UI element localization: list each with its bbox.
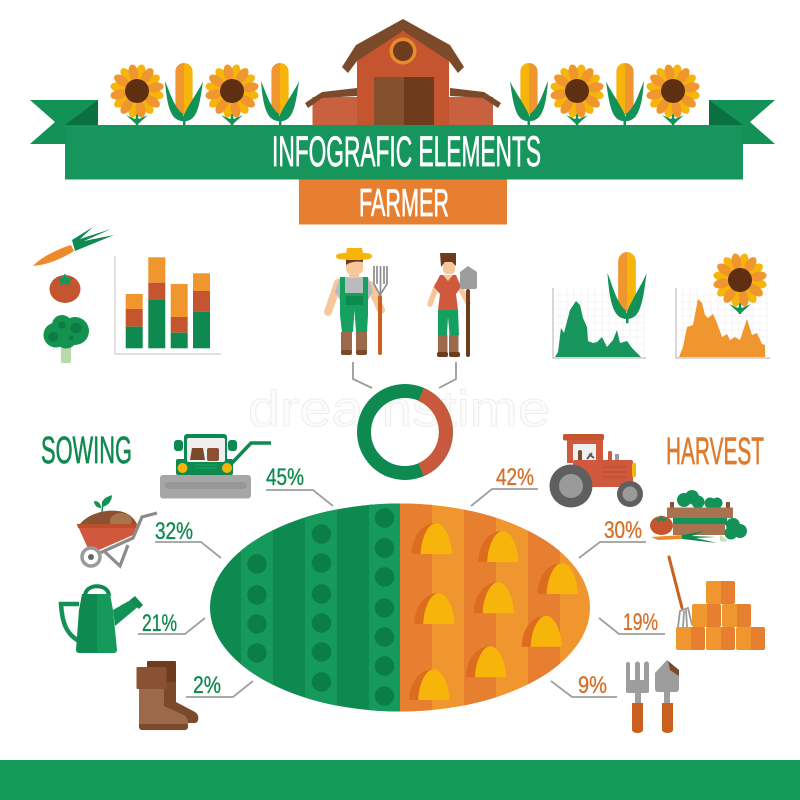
bar 4 [193, 273, 210, 348]
label 19%: 19% [623, 609, 658, 636]
ribbon banner [30, 100, 775, 180]
sunflower area chart [676, 253, 770, 358]
label 30%: 30% [604, 517, 642, 544]
connector lines to donut [353, 362, 456, 388]
icon: wheelbarrow [77, 495, 157, 566]
label 42%: 42% [496, 464, 534, 491]
sunflower row right [510, 63, 700, 125]
farmer man [328, 248, 387, 355]
harvest half [400, 500, 590, 715]
watermark: dreamstime [248, 381, 550, 437]
barn [305, 19, 501, 125]
leader lines [138, 489, 665, 697]
label 32%: 32% [155, 518, 193, 545]
sunflower row left [110, 63, 299, 125]
donut chart [364, 391, 446, 473]
icon: vegetable crate [650, 490, 747, 543]
icon: boots [136, 661, 198, 730]
bar 3 [171, 284, 188, 348]
corn area chart [553, 252, 647, 358]
sowing half [210, 500, 400, 715]
icon: watering can [61, 586, 143, 653]
subtitle: FARMER [359, 182, 449, 225]
icon: seeder [160, 434, 271, 498]
title: INFOGRAFIC ELEMENTS [272, 128, 541, 176]
subtitle box [299, 180, 507, 224]
icon: broccoli [44, 315, 89, 363]
bar 2 [148, 257, 165, 348]
label 45%: 45% [266, 464, 304, 491]
icon: hay bales and fork [669, 557, 765, 650]
farmer woman [430, 253, 477, 357]
bar chart [115, 256, 221, 354]
label 2%: 2% [193, 672, 221, 699]
footer bar [0, 760, 800, 800]
bar 1 [126, 294, 143, 348]
icon: tractor [550, 434, 643, 508]
icon: carrot [33, 227, 114, 266]
icon: garden fork and trowel [626, 660, 679, 733]
field oval [210, 500, 590, 715]
heading: sowing: SOWING [41, 430, 132, 472]
icon: tomato [50, 273, 80, 303]
label 21%: 21% [142, 610, 177, 637]
label 9%: 9% [578, 672, 607, 699]
